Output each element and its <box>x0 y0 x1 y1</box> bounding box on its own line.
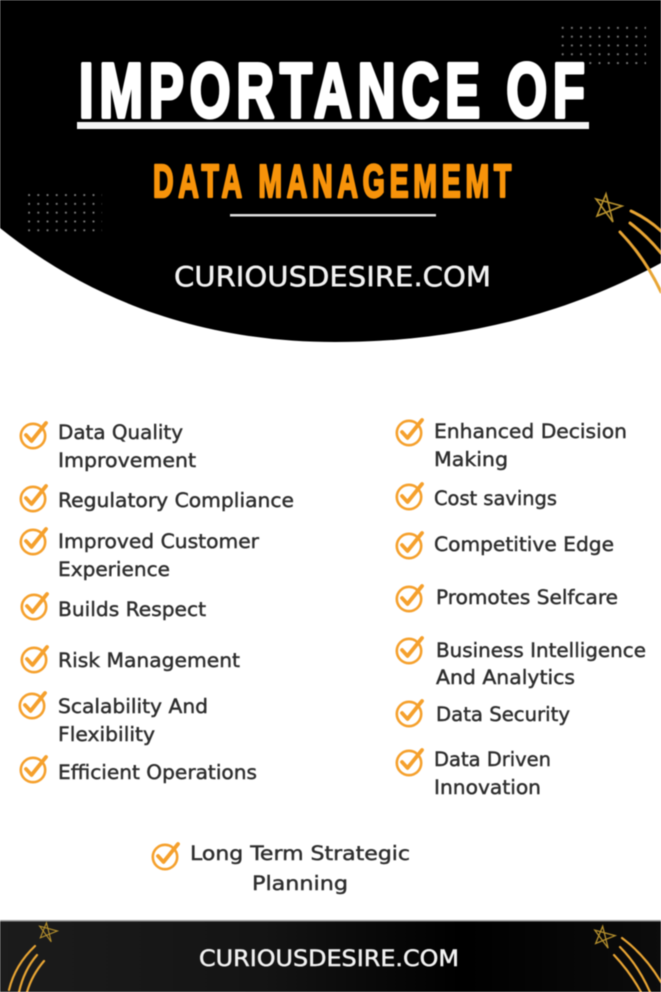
item: Cost savings <box>397 484 557 510</box>
item: Scalability And Flexibility: Flexibility <box>58 723 155 746</box>
dot pattern: left <box>23 192 102 235</box>
footer bar <box>0 920 661 992</box>
subtitle divider <box>230 214 436 216</box>
item: Enhanced Decision Making <box>397 420 627 471</box>
icon: shooting star, footer right <box>595 926 661 992</box>
item: Builds Respect: Builds Respect <box>58 598 206 621</box>
item: Regulatory Compliance: Regulatory Compliance <box>58 489 294 512</box>
item: Efficient Operations <box>21 757 257 784</box>
item: Data Security: Data Security <box>436 703 570 726</box>
item: Improved Customer Experience: Improved Customer <box>58 530 260 553</box>
item: Efficient Operations: Efficient Operations <box>58 761 257 784</box>
item: Competitive Edge: Competitive Edge <box>434 533 614 556</box>
dot pattern: top right <box>560 22 646 69</box>
item: Data Quality Improvement <box>21 421 196 472</box>
item: Builds Respect <box>22 594 206 621</box>
item: Long Term Strategic Planning: Planning <box>252 872 348 895</box>
item: Enhanced Decision Making: Enhanced Decision <box>434 420 627 443</box>
item: Improved Customer Experience: Experience <box>58 558 170 581</box>
icon: shooting star, footer left <box>9 923 57 992</box>
item: Enhanced Decision Making: Making <box>434 448 508 471</box>
item: Scalability And Flexibility <box>20 693 208 746</box>
item: Data Driven Innovation: Innovation <box>434 776 541 799</box>
website label: footer: CURIOUSDESIRE.COM <box>199 947 459 972</box>
icon: shooting star, header <box>596 194 661 292</box>
website label: header: CURIOUSDESIRE.COM <box>174 260 491 293</box>
item: Data Quality Improvement: Improvement <box>58 449 196 472</box>
item: Business Intelligence And Analytics: And Analytics <box>436 666 575 689</box>
item: Risk Management: Risk Management <box>58 649 240 672</box>
item: Promotes Selfcare: Promotes Selfcare <box>436 586 618 609</box>
title underline <box>77 122 589 129</box>
checklist: left column <box>20 421 294 784</box>
item: Data Driven Innovation <box>397 748 551 799</box>
subtitle: DATA MANAGEMEMT <box>153 156 511 208</box>
item: Data Driven Innovation: Data Driven <box>434 748 551 771</box>
item: Scalability And Flexibility: Scalability And <box>58 695 208 718</box>
title: IMPORTANCE OF <box>79 47 585 133</box>
checklist: right column <box>397 420 646 799</box>
header background <box>0 0 661 342</box>
item: Business Intelligence And Analytics: Business Intelligence <box>436 639 646 662</box>
item: Business Intelligence And Analytics <box>397 638 646 689</box>
item: Data Quality Improvement: Data Quality <box>58 421 183 444</box>
item: Improved Customer Experience <box>21 529 260 581</box>
item: Long Term Strategic Planning: Long Term Strategic <box>190 842 410 865</box>
item: Cost savings: Cost savings <box>434 487 557 510</box>
item: Long Term Strategic Planning <box>153 842 410 895</box>
